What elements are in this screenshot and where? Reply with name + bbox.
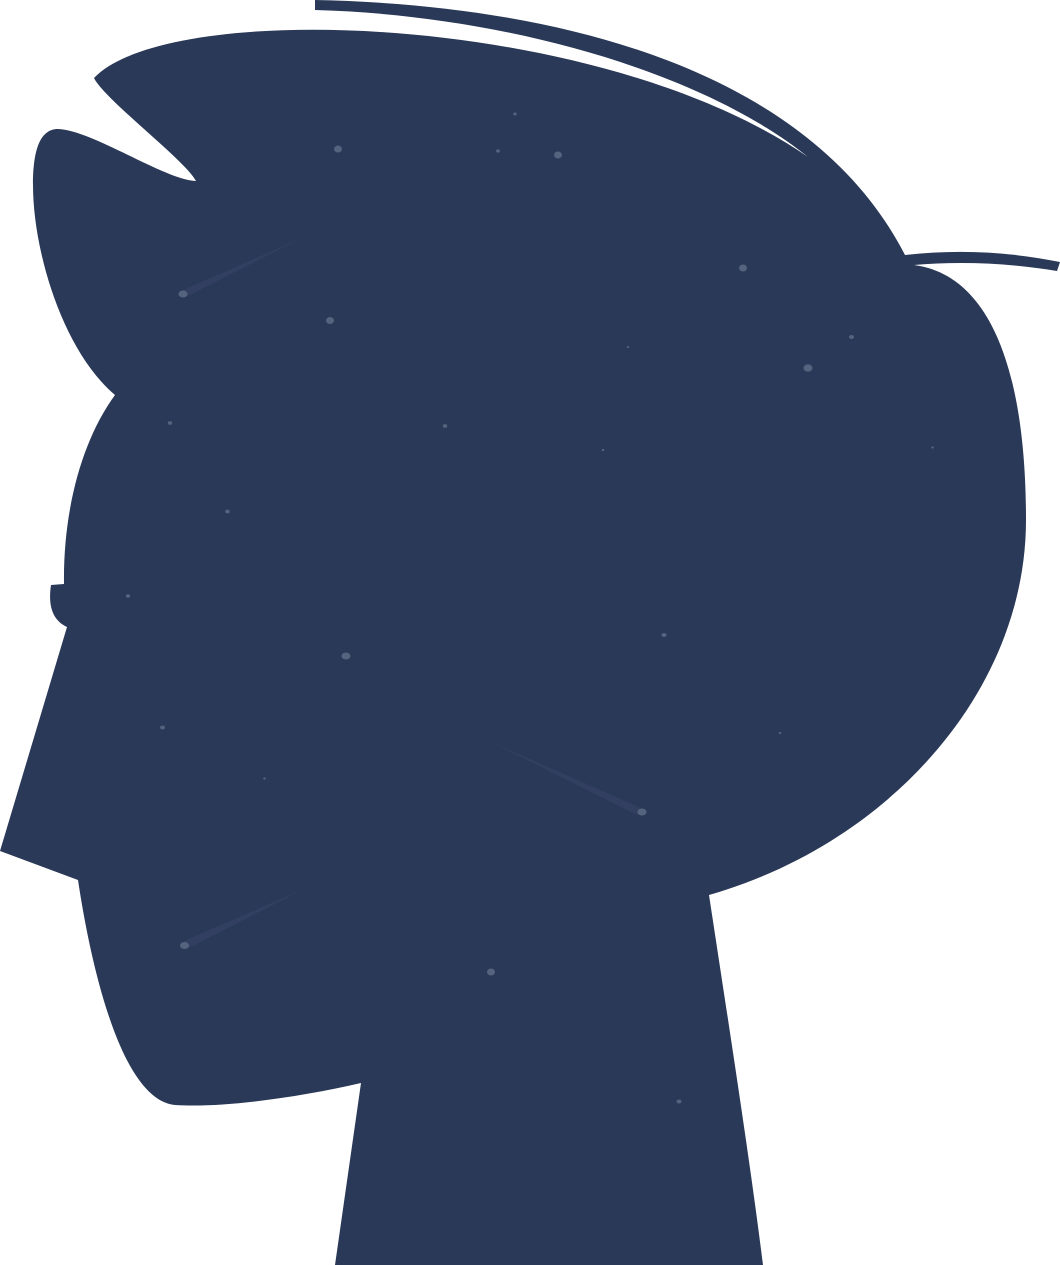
shooting stars	[178, 237, 646, 949]
shooting star: lower left	[180, 889, 304, 949]
stars	[126, 112, 934, 1104]
shooting star: upper left	[178, 237, 304, 298]
shooting star: centre	[489, 741, 646, 816]
